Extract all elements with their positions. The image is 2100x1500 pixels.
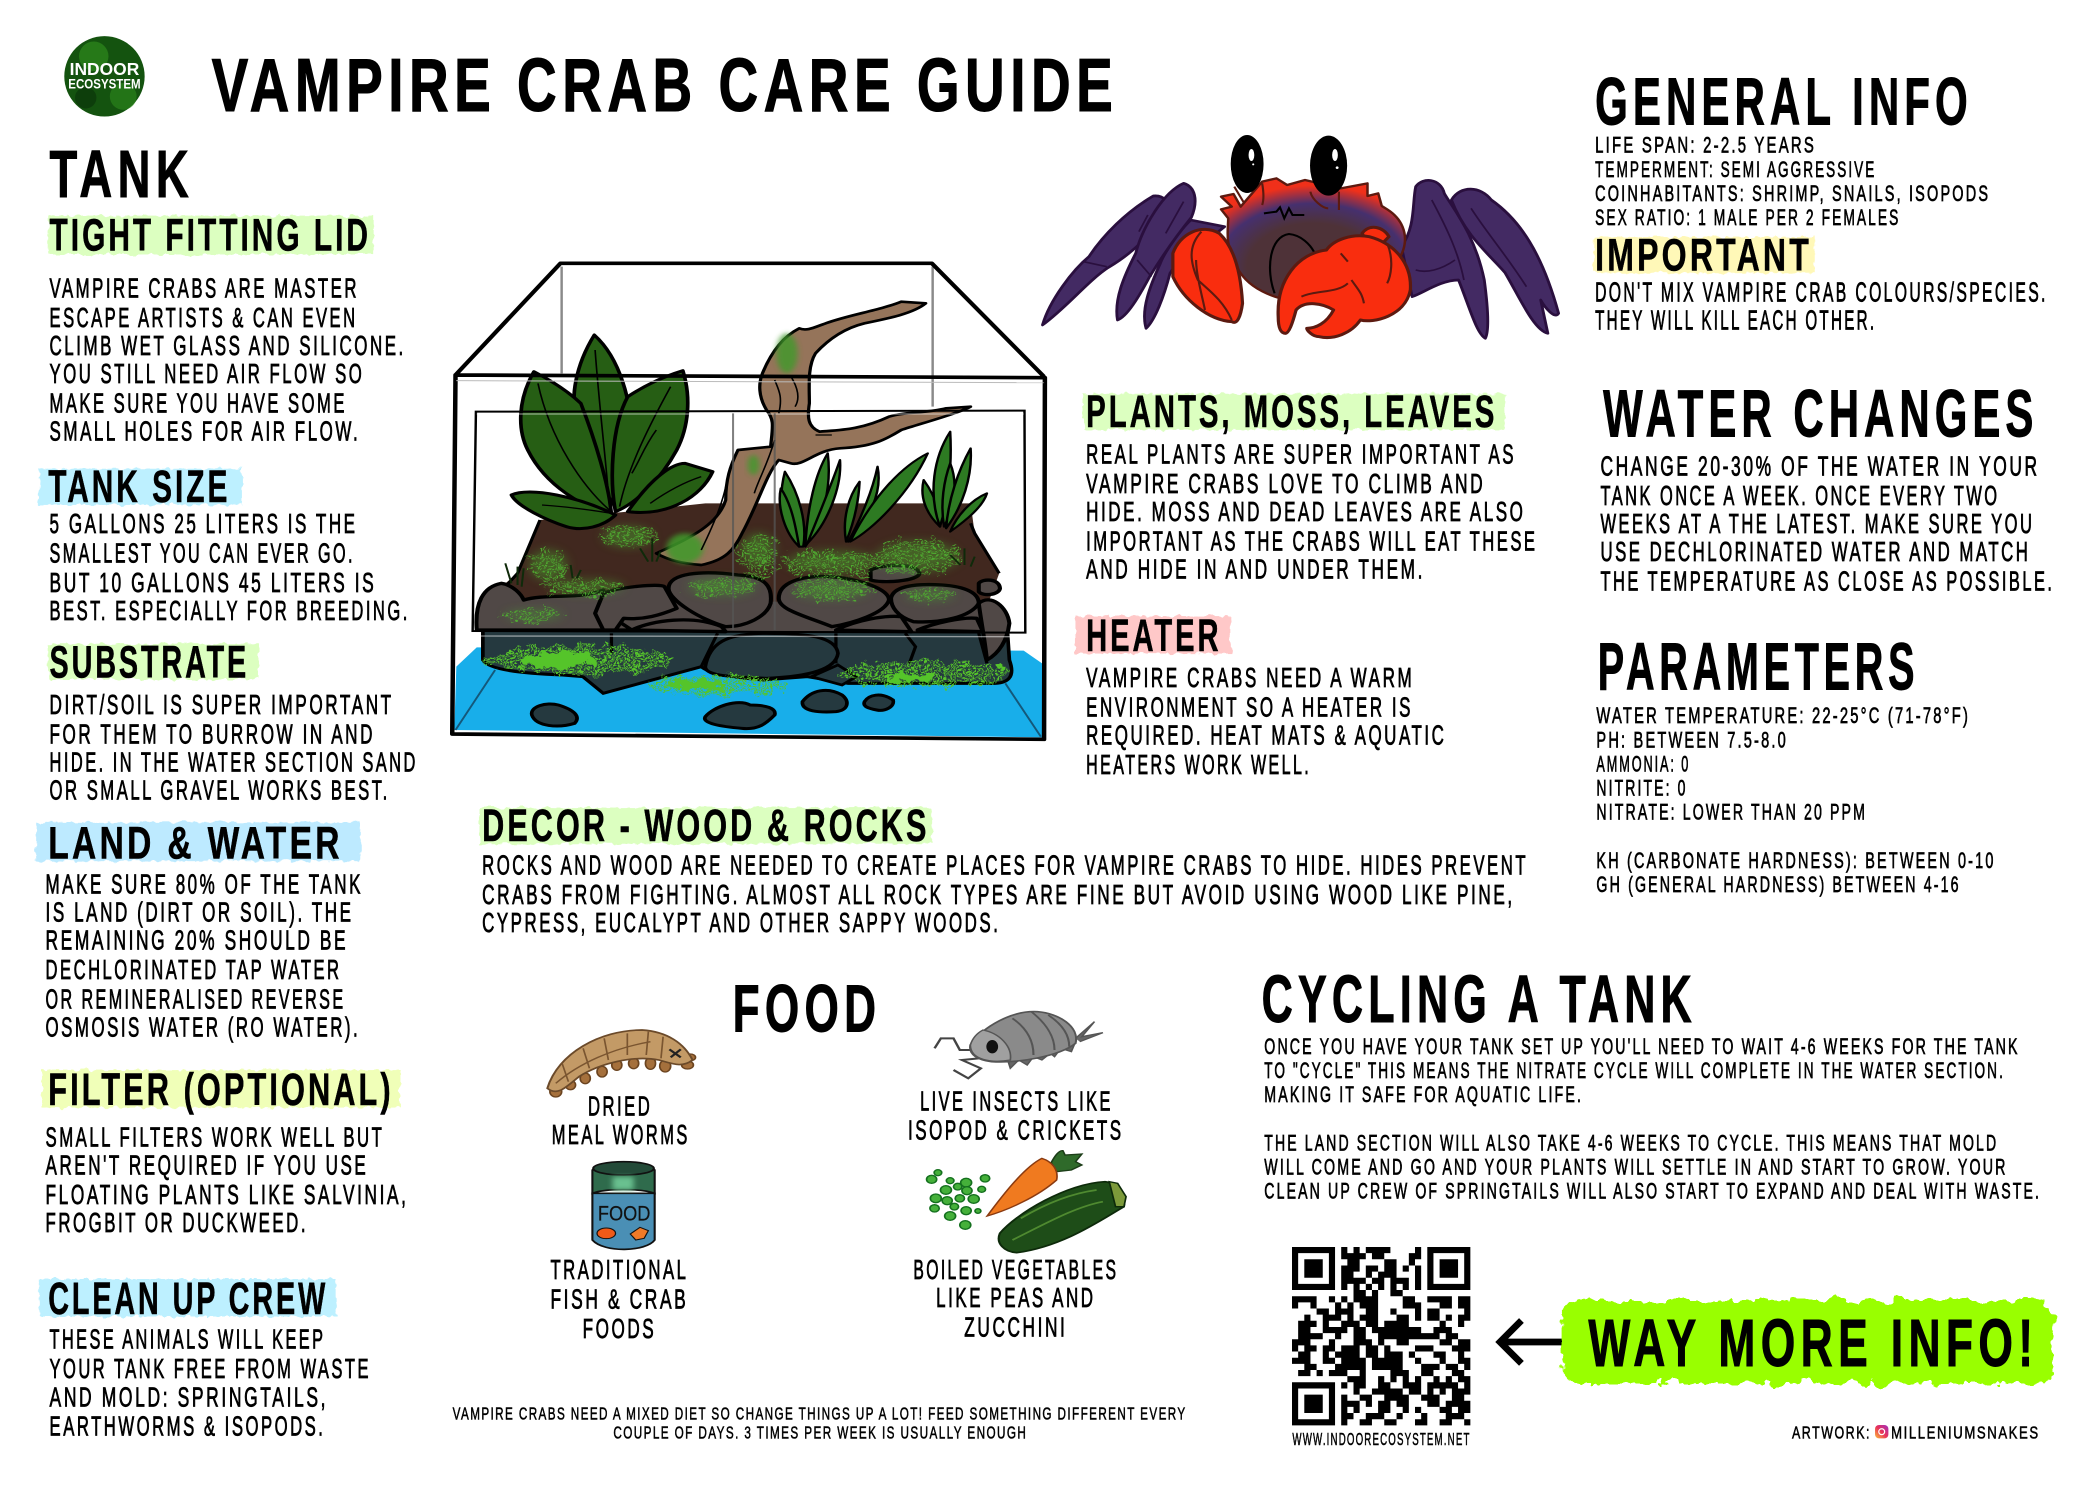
label: boiled vegetables: BOILED VEGETABLES bbox=[913, 1254, 1118, 1285]
submerged rocks bbox=[483, 630, 1012, 693]
website url: WWW.INDOORECOSYSTEM.NET bbox=[1292, 1429, 1471, 1449]
label: live insects bbox=[908, 1085, 1124, 1146]
section: substrate bbox=[48, 637, 418, 806]
back glass posts bbox=[562, 267, 933, 407]
panel: parameters: AMMONIA: 0 bbox=[1596, 751, 1690, 776]
section: tight fitting lid: SMALL HOLES FOR AIR FLOW. bbox=[50, 416, 360, 447]
section: land and water: OR REMINERALISED REVERSE bbox=[46, 983, 346, 1014]
section: tight fitting lid: CLIMB WET GLASS AND SILICONE. bbox=[50, 330, 406, 361]
panel: decor wood and rocks: DECOR - WOOD & ROCKS bbox=[482, 800, 929, 851]
illustration: vampire crab bbox=[1042, 135, 1559, 338]
icon: isopod bbox=[935, 1012, 1103, 1078]
QR code bbox=[1292, 1247, 1470, 1425]
panel: plants moss leaves: PLANTS, MOSS, LEAVES bbox=[1086, 386, 1497, 437]
artwork credit bbox=[1792, 1422, 2040, 1442]
section: land and water: REMAINING 20% SHOULD BE bbox=[46, 925, 348, 956]
panel: decor wood and rocks: CYPRESS, EUCALYPT AND OTHER SAPPY WOODS. bbox=[482, 907, 1000, 938]
crab legs bbox=[1042, 180, 1559, 338]
panel: plants moss leaves: VAMPIRE CRABS LOVE TO CLIMB AND bbox=[1086, 468, 1485, 499]
label: fish and crab foods: FOODS bbox=[583, 1313, 656, 1344]
panel: heater: REQUIRED. HEAT MATS & AQUATIC bbox=[1086, 720, 1446, 751]
icon: meal worm bbox=[547, 1030, 696, 1097]
artwork credit: MILLENIUMSNAKES bbox=[1891, 1422, 2040, 1442]
food note: COUPLE OF DAYS. 3 TIMES PER WEEK IS USUALLY ENOUGH bbox=[613, 1422, 1027, 1442]
crab eyes bbox=[1231, 135, 1347, 210]
panel: heater bbox=[1075, 610, 1446, 780]
section: filter optional bbox=[42, 1064, 408, 1238]
label: fish and crab foods: TRADITIONAL bbox=[550, 1254, 688, 1285]
artwork credit: ARTWORK: bbox=[1792, 1422, 1871, 1442]
panel: food bbox=[453, 971, 1187, 1442]
section: substrate: OR SMALL GRAVEL WORKS BEST. bbox=[50, 775, 390, 806]
section: filter optional: FILTER (OPTIONAL) bbox=[48, 1064, 394, 1115]
section: land and water: OSMOSIS WATER (RO WATER). bbox=[46, 1012, 360, 1043]
icon: food can bbox=[592, 1162, 655, 1249]
driftwood bbox=[656, 302, 971, 565]
section: clean up crew: CLEAN UP CREW bbox=[48, 1273, 328, 1324]
panel: cycling a tank: CYCLING A TANK bbox=[1262, 962, 1697, 1037]
upper rocks bbox=[476, 565, 1009, 660]
title: VAMPIRE CRAB CARE GUIDE bbox=[212, 43, 1118, 127]
section: tank size: BUT 10 GALLONS 45 LITERS IS bbox=[50, 567, 376, 598]
panel: heater: HEATERS WORK WELL. bbox=[1086, 749, 1311, 780]
large plant bbox=[511, 335, 713, 529]
moss glow bbox=[505, 527, 958, 620]
label: meal worms: MEAL WORMS bbox=[552, 1119, 690, 1150]
illustration: terrarium tank bbox=[452, 263, 1045, 739]
panel: general info bbox=[1594, 65, 2048, 335]
panel: plants moss leaves: REAL PLANTS ARE SUPER IMPORTANT AS bbox=[1086, 438, 1516, 469]
section: filter optional: AREN'T REQUIRED IF YOU USE bbox=[46, 1150, 368, 1181]
label: boiled vegetables: ZUCCHINI bbox=[964, 1312, 1067, 1343]
section: tank size: TANK SIZE bbox=[48, 461, 230, 512]
section: substrate: HIDE. IN THE WATER SECTION SAND bbox=[50, 746, 418, 777]
panel: general info: SEX RATIO: 1 MALE PER 2 FEMALES bbox=[1595, 205, 1900, 230]
section: land and water bbox=[36, 817, 363, 1043]
rock backing bbox=[480, 602, 1009, 632]
panel: plants moss leaves: AND HIDE IN AND UNDER THEM. bbox=[1086, 554, 1425, 585]
section: substrate: SUBSTRATE bbox=[50, 637, 249, 688]
section: tight fitting lid bbox=[48, 209, 406, 447]
food note bbox=[453, 1404, 1187, 1442]
heading: food: FOOD bbox=[733, 971, 881, 1046]
section: tank size bbox=[39, 461, 410, 626]
heading: tank: TANK bbox=[50, 137, 194, 212]
panel: parameters: PH: BETWEEN 7.5-8.0 bbox=[1596, 727, 1788, 752]
section: filter optional: FLOATING PLANTS LIKE SALVINIA, bbox=[46, 1179, 408, 1210]
label: meal worms: DRIED bbox=[588, 1091, 652, 1122]
icon: peas carrot zucchini bbox=[927, 1151, 1126, 1253]
section: tight fitting lid: VAMPIRE CRABS ARE MASTER bbox=[50, 272, 359, 303]
important note bbox=[1594, 230, 2048, 335]
icon: food can: FOOD bbox=[598, 1202, 650, 1226]
panel: plants moss leaves: HIDE. MOSS AND DEAD LEAVES ARE ALSO bbox=[1086, 496, 1525, 527]
panel: tank column bbox=[36, 137, 418, 1442]
logo: Indoor Ecosystem: ECOSYSTEM bbox=[68, 76, 141, 91]
panel: cycling a tank: MAKING IT SAFE FOR AQUATIC LIFE. bbox=[1264, 1082, 1583, 1107]
logo: Indoor Ecosystem: INDOOR bbox=[70, 59, 140, 79]
crab mouth marks bbox=[1264, 207, 1314, 293]
section: tight fitting lid: ESCAPE ARTISTS & CAN EVEN bbox=[50, 302, 358, 333]
section: tight fitting lid: MAKE SURE YOU HAVE SOME bbox=[50, 388, 347, 419]
section: land and water: DECHLORINATED TAP WATER bbox=[46, 954, 342, 985]
section: tank size: BEST. ESPECIALLY FOR BREEDING. bbox=[50, 595, 410, 626]
glass outline bbox=[452, 263, 1045, 739]
logo: Indoor Ecosystem bbox=[64, 36, 145, 117]
label: fish and crab foods bbox=[550, 1254, 688, 1344]
panel: plants moss leaves: IMPORTANT AS THE CRABS WILL EAT THESE bbox=[1086, 525, 1538, 556]
panel: parameters: NITRATE: LOWER THAN 20 PPM bbox=[1596, 800, 1867, 825]
panel: parameters: NITRITE: 0 bbox=[1596, 776, 1688, 801]
crab shell bbox=[1221, 178, 1405, 303]
panel: decor wood and rocks bbox=[479, 800, 1528, 938]
duckweed bbox=[485, 645, 1011, 696]
important note: IMPORTANT bbox=[1595, 230, 1812, 281]
panel: heater: HEATER bbox=[1086, 610, 1221, 661]
panel: heater: VAMPIRE CRABS NEED A WARM bbox=[1086, 662, 1414, 693]
section: land and water: LAND & WATER bbox=[48, 817, 343, 868]
panel: parameters bbox=[1596, 630, 1996, 897]
grass clusters bbox=[780, 432, 987, 547]
section: tank size: 5 GALLONS 25 LITERS IS THE bbox=[50, 508, 358, 539]
section: filter optional: FROGBIT OR DUCKWEED. bbox=[46, 1207, 308, 1238]
section: land and water: IS LAND (DIRT OR SOIL). THE bbox=[46, 896, 354, 927]
food note: VAMPIRE CRABS NEED A MIXED DIET SO CHANGE THINGS UP A LOT! FEED SOMETHING DIFFERENT EVERY bbox=[453, 1404, 1187, 1424]
section: filter optional: SMALL FILTERS WORK WELL BUT bbox=[46, 1121, 384, 1152]
panel: general info: LIFE SPAN: 2-2.5 YEARS bbox=[1595, 133, 1816, 158]
panel: heater: ENVIRONMENT SO A HEATER IS bbox=[1086, 692, 1413, 723]
panel: decor wood and rocks: CRABS FROM FIGHTING. ALMOST ALL ROCK TYPES ARE FINE BUT AVOID USING WOOD LIKE PINE, bbox=[482, 879, 1515, 910]
section: tight fitting lid: YOU STILL NEED AIR FLOW SO bbox=[50, 358, 364, 389]
important note: THEY WILL KILL EACH OTHER. bbox=[1595, 304, 1876, 335]
panel: plants moss leaves bbox=[1083, 386, 1538, 585]
section: tank size: SMALLEST YOU CAN EVER GO. bbox=[50, 538, 355, 569]
section: clean up crew: EARTHWORMS & ISOPODS. bbox=[50, 1411, 325, 1442]
section: substrate: DIRT/SOIL IS SUPER IMPORTANT bbox=[50, 689, 394, 720]
soil bbox=[477, 503, 999, 617]
panel: cycling a tank bbox=[1262, 962, 2041, 1204]
label: live insects: ISOPOD & CRICKETS bbox=[908, 1115, 1124, 1146]
water bbox=[454, 647, 1042, 737]
label: meal worms bbox=[552, 1091, 690, 1150]
tiny grass tufts bbox=[505, 538, 975, 587]
arrow bbox=[1500, 1321, 1580, 1363]
icon: instagram bbox=[1875, 1425, 1888, 1438]
panel: water changes bbox=[1600, 377, 2054, 597]
panel: general info: TEMPERMENT: SEMI AGGRESSIVE bbox=[1595, 157, 1876, 182]
section: clean up crew: AND MOLD: SPRINGTAILS, bbox=[50, 1381, 328, 1412]
section: land and water: MAKE SURE 80% OF THE TANK bbox=[46, 868, 363, 899]
section: clean up crew: YOUR TANK FREE FROM WASTE bbox=[50, 1353, 371, 1384]
label: boiled vegetables bbox=[913, 1254, 1118, 1343]
label: fish and crab foods: FISH & CRAB bbox=[550, 1283, 688, 1314]
label: boiled vegetables: LIKE PEAS AND bbox=[936, 1282, 1096, 1313]
section: clean up crew: THESE ANIMALS WILL KEEP bbox=[50, 1324, 325, 1355]
moss bbox=[501, 525, 962, 622]
section: substrate: FOR THEM TO BURROW IN AND bbox=[50, 718, 375, 749]
label: live insects: LIVE INSECTS LIKE bbox=[920, 1085, 1113, 1116]
section: tight fitting lid: TIGHT FITTING LID bbox=[50, 209, 371, 260]
crab claws bbox=[1173, 227, 1410, 338]
section: clean up crew bbox=[39, 1273, 371, 1442]
